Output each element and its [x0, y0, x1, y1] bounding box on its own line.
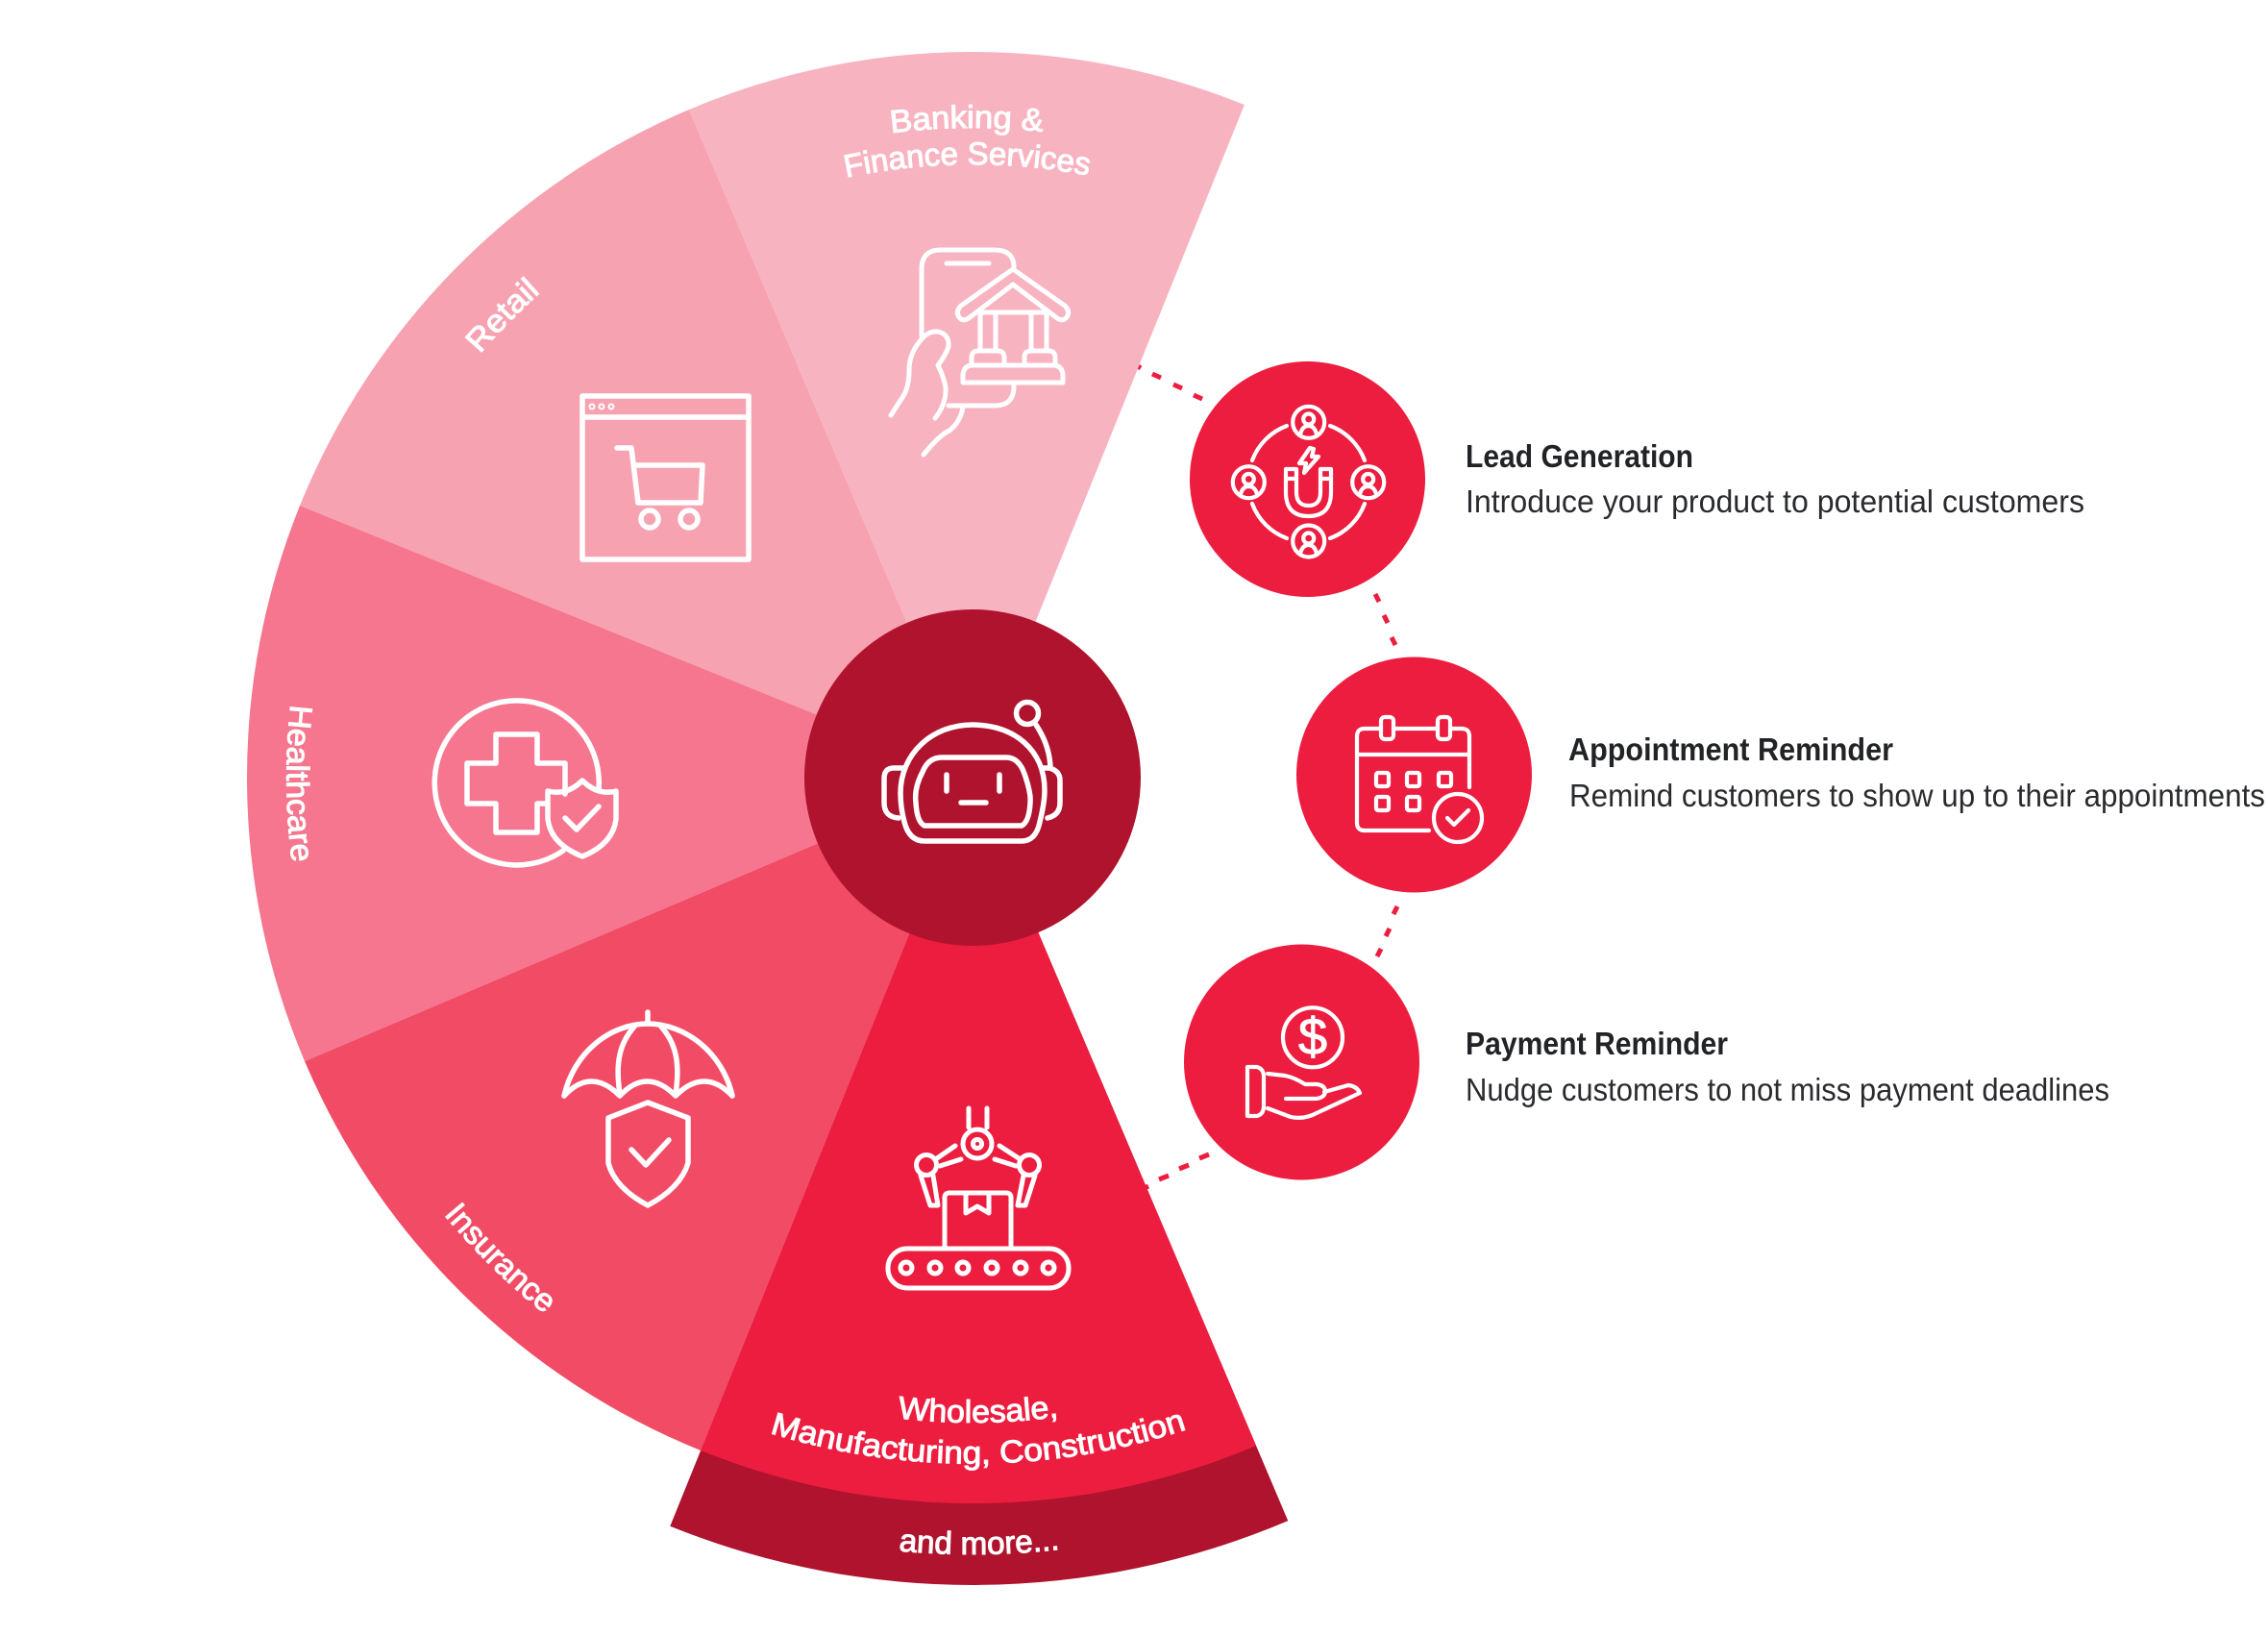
- segment: banking and finance: [688, 50, 1250, 781]
- icon: browser window with cart: [582, 396, 749, 559]
- label: banking line 2: Finance Services: [844, 142, 1090, 178]
- icon: calendar with check: [1357, 717, 1482, 842]
- circle: payment reminder: [1184, 944, 1419, 1180]
- dotted connector: payment to wheel: [1145, 1154, 1209, 1188]
- text: lead generation: [1466, 438, 2084, 519]
- title: appointment reminder: Appointment Reminder: [1568, 731, 1893, 767]
- label: wholesale line 2: Manufacturing, Construction: [771, 1412, 1186, 1471]
- icon: magnet attracting users: [1233, 407, 1384, 558]
- title: lead generation: Lead Generation: [1466, 438, 1693, 474]
- circle: appointment reminder: [1296, 657, 1532, 892]
- hub circle: [804, 609, 1141, 946]
- segment: retail: [296, 108, 973, 783]
- dotted connector: wheel to lead generation: [1138, 366, 1202, 399]
- icon: umbrella with shield: [564, 1012, 732, 1205]
- dotted connector: appointment to payment: [1377, 906, 1397, 956]
- icon: hand holding coin: [1247, 1007, 1360, 1118]
- icon: phone with bank: [891, 250, 1069, 455]
- label: and more: and more...: [900, 1530, 1057, 1555]
- label: banking line 1: Banking &: [891, 104, 1044, 136]
- description: lead generation: Introduce your product to potential customers: [1466, 483, 2084, 519]
- description: payment reminder: Nudge customers to not miss payment deadlines: [1466, 1072, 2109, 1107]
- label: wholesale line 1: Wholesale,: [900, 1396, 1057, 1424]
- icon: medical cross with shield: [434, 701, 616, 865]
- circle: lead generation: [1190, 361, 1425, 597]
- text: appointment reminder: [1568, 731, 2265, 813]
- segment: healthcare: [245, 500, 975, 1062]
- icon: robot arm and conveyor: [888, 1108, 1069, 1288]
- title: payment reminder: Payment Reminder: [1466, 1026, 1728, 1061]
- industry wheel: [247, 52, 1288, 1585]
- text: payment reminder: [1466, 1026, 2109, 1107]
- label: retail: Retail: [465, 276, 540, 353]
- label: healthcare: Healthcare: [286, 706, 313, 861]
- segment: wholesale: [695, 775, 1257, 1505]
- segment: insurance: [303, 778, 978, 1454]
- icon: hand holding coin: $: [1298, 1008, 1327, 1066]
- label: insurance: Insurance: [445, 1202, 553, 1311]
- dotted connector: lead generation to appointment: [1375, 594, 1395, 645]
- segment: and more band: [664, 775, 1289, 1588]
- icon: robot head: [884, 702, 1060, 841]
